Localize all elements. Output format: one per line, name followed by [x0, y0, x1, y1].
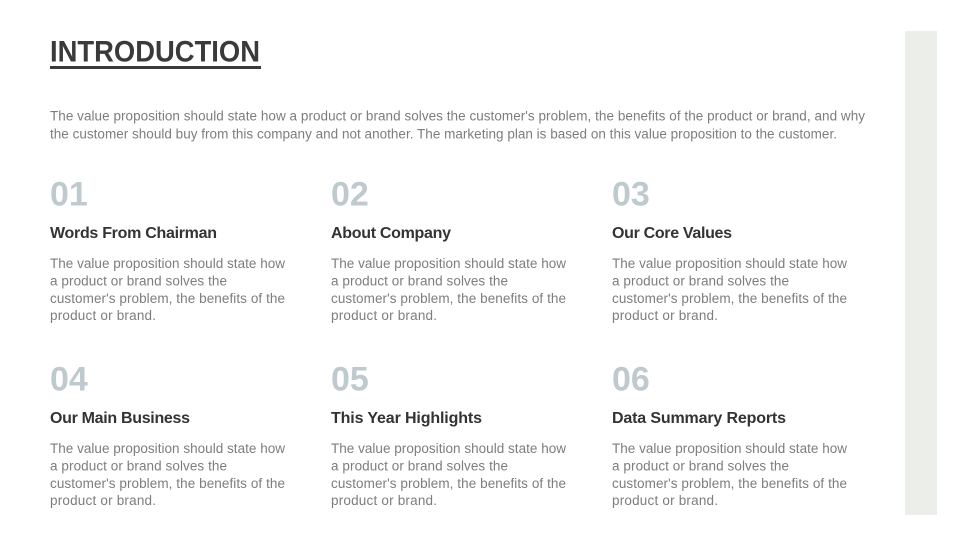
item 04: 04 [50, 360, 88, 398]
item 02: The value proposition should state how [331, 256, 566, 271]
item 02: a product or brand solves the [331, 274, 508, 288]
item 04: The value proposition should state how [50, 441, 285, 456]
intro paragraph: The value proposition should state how a product or brand solves the customer's problem, the benefits of the product or brand, and why [50, 108, 865, 124]
item 05: 05 [331, 360, 369, 398]
item 03 [612, 176, 847, 323]
item 04: customer's problem, the benefits of the [50, 476, 285, 491]
intro paragraph: the customer should buy from this company and not another. The marketing plan is based on this value proposition to the customer. [50, 126, 837, 142]
item 01: customer's problem, the benefits of the [50, 291, 285, 306]
item 03: The value proposition should state how [612, 256, 847, 271]
item 04 [50, 360, 285, 508]
item 04: a product or brand solves the [50, 458, 227, 474]
item 06: customer's problem, the benefits of the [612, 476, 847, 491]
title: INTRODUCTION [50, 36, 260, 68]
item 03: customer's problem, the benefits of the [612, 291, 847, 306]
item 06: product or brand. [612, 493, 718, 508]
item 01: a product or brand solves the [50, 274, 227, 288]
item 06: The value proposition should state how [612, 441, 847, 456]
item 02: About Company [331, 225, 451, 242]
item 02: 02 [331, 176, 369, 214]
item 02 [331, 176, 566, 323]
item 03: a product or brand solves the [612, 274, 789, 288]
item 05: The value proposition should state how [331, 441, 566, 456]
item 02: customer's problem, the benefits of the [331, 291, 566, 306]
item 06 [612, 360, 847, 508]
item 06: a product or brand solves the [612, 458, 789, 474]
item 01 [50, 176, 285, 323]
item 03: 03 [612, 176, 650, 214]
item 05: product or brand. [331, 493, 437, 508]
item 05: This Year Highlights [331, 410, 482, 427]
intro paragraph [50, 108, 865, 142]
item 02: product or brand. [331, 308, 437, 323]
item 01: Words From Chairman [50, 225, 217, 242]
item 06: Data Summary Reports [612, 410, 786, 427]
item 01: 01 [50, 176, 88, 214]
item 06: 06 [612, 360, 650, 398]
item 01: The value proposition should state how [50, 256, 285, 271]
item 03: product or brand. [612, 308, 718, 323]
item 04: Our Main Business [50, 410, 190, 427]
item 05: a product or brand solves the [331, 458, 508, 474]
item 04: product or brand. [50, 493, 156, 508]
item 01: product or brand. [50, 308, 156, 323]
item 05 [331, 360, 566, 508]
item 05: customer's problem, the benefits of the [331, 476, 566, 491]
item 03: Our Core Values [612, 225, 732, 242]
side panel [905, 31, 937, 515]
